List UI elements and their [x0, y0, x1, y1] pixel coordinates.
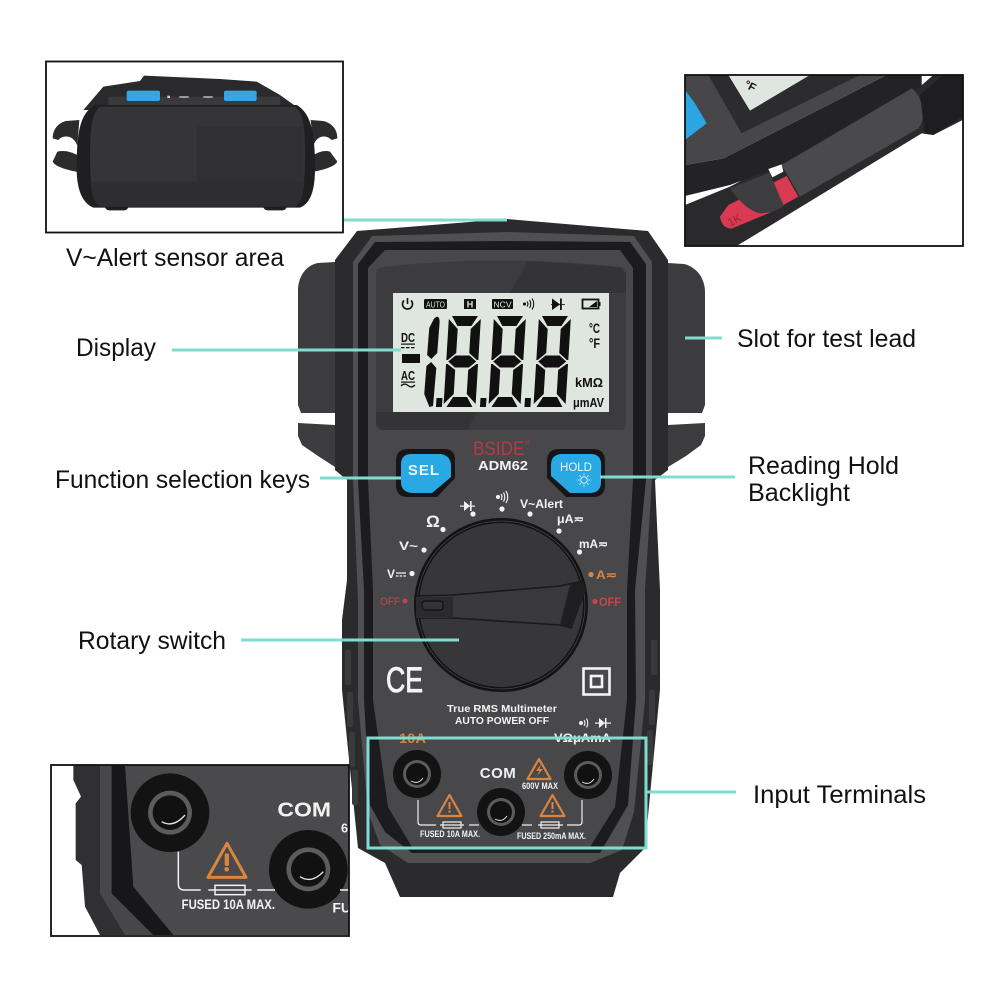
LCD DC AC labels	[401, 330, 420, 387]
LCD digit eight	[533, 316, 571, 407]
meter black band	[685, 75, 922, 196]
LCD DC AC labels: DC	[401, 330, 415, 345]
cropped fuse text: FU	[332, 900, 351, 916]
inset frame 3	[51, 765, 349, 936]
rotary dial scale labels: OFF	[599, 595, 621, 609]
warning: 600V MAX: 600V MAX	[522, 781, 558, 791]
warning triangle: 10A fuse	[438, 795, 462, 816]
fuse ratings: FUSED 250mA MAX.	[517, 831, 586, 841]
display bezel	[708, 75, 860, 133]
COM label: COM	[480, 765, 516, 782]
large jack centre	[269, 830, 348, 909]
fuse ratings	[420, 829, 586, 841]
face plate	[368, 250, 633, 847]
inset frame 2	[685, 75, 963, 246]
brand BSIDE: ®	[525, 439, 531, 447]
grey side band	[100, 765, 153, 935]
blue key	[685, 90, 707, 140]
callout line: V~Alert	[343, 218, 507, 222]
cropped 600V label: 6	[341, 822, 348, 836]
inset frame 1	[46, 62, 343, 232]
product description text: AUTO POWER OFF	[455, 715, 550, 727]
LCD unit labels: μmAV	[573, 395, 604, 410]
label: Display: Display	[76, 334, 156, 362]
SEL key	[396, 449, 455, 497]
terminal symbol labels	[399, 718, 611, 746]
callout line: Slot	[685, 336, 722, 340]
HOLD backlight key: HOLD	[560, 462, 592, 474]
upper clip arm	[782, 88, 923, 197]
rear top of housing	[83, 76, 303, 112]
main rubber body	[77, 105, 315, 208]
meter face	[685, 75, 887, 165]
right test lead clip	[668, 263, 705, 467]
inset: test lead in slot: °F	[742, 79, 758, 95]
rotary dial scale labels	[380, 491, 621, 609]
callout box: input terminals	[368, 738, 646, 848]
LCD screen	[393, 293, 609, 412]
LCD digit one	[423, 317, 447, 407]
inset: top of meter with sensor area	[52, 76, 338, 210]
label: Reading Hold Backlight: Backlight	[748, 479, 850, 507]
LCD status icons	[402, 298, 600, 310]
inset: test lead in slot: 1K	[726, 212, 744, 229]
warning triangle: 250mA fuse	[540, 795, 564, 816]
LCD unit labels: kMΩ	[575, 375, 603, 390]
slot gap	[768, 164, 783, 177]
product description text	[447, 703, 557, 727]
callout line: Hold	[600, 476, 735, 478]
fuse line	[178, 852, 349, 895]
LCD unit labels: °C	[589, 320, 600, 336]
cable cuff	[920, 75, 963, 135]
rotary pointer	[414, 581, 586, 628]
LCD fragment	[728, 75, 810, 111]
SEL key: SEL	[408, 462, 440, 479]
rotary dial scale labels: OFF	[380, 596, 400, 608]
LCD digit eight	[488, 316, 536, 407]
model ADM62: ADM62	[478, 458, 528, 473]
label: Reading Hold Backlight	[748, 452, 899, 507]
clip arms	[53, 120, 337, 172]
double insulation symbol	[584, 668, 610, 694]
LCD status icons: AUTO	[426, 300, 445, 309]
product description text: True RMS Multimeter	[447, 703, 557, 715]
CE mark: CE	[386, 661, 423, 700]
inset: test lead in slot	[685, 75, 963, 246]
rotary dial scale labels: mA≂	[579, 537, 608, 551]
display bezel	[376, 260, 626, 430]
LCD status icons: H	[467, 300, 473, 310]
terminal symbol labels: 10A	[399, 730, 426, 746]
rotary switch	[414, 518, 588, 692]
lower clip arm	[730, 173, 784, 213]
rotary dial scale labels: V	[387, 567, 395, 581]
HOLD backlight key	[547, 449, 605, 497]
callout line: Input terminals	[646, 790, 736, 794]
black test lead	[685, 75, 963, 246]
inset: terminals close-up	[51, 765, 351, 935]
left test lead clip	[298, 262, 335, 467]
feet	[105, 208, 286, 210]
COM label: COM	[277, 800, 331, 822]
rotary dial scale labels: V~Alert	[520, 497, 563, 511]
callout line: Function keys	[320, 476, 401, 480]
rotary dial scale labels: A≂	[596, 568, 617, 582]
fuse text: FUSED 10A MAX.	[182, 896, 275, 912]
label: Slot for test lead: Slot for test lead	[737, 325, 916, 353]
callout line: Display	[172, 348, 401, 352]
callout line: Rotary switch	[241, 638, 459, 642]
LCD DC AC labels: AC	[401, 368, 415, 383]
rubber edge	[73, 765, 173, 935]
LCD digit eight	[443, 316, 492, 407]
warning triangle	[208, 843, 246, 877]
meter rubber housing	[335, 219, 668, 897]
side grip ridges	[345, 640, 657, 805]
rotary dial scale labels: V~	[399, 539, 418, 553]
label: Input Terminals: Input Terminals	[753, 781, 926, 809]
LCD unit labels: °F	[589, 335, 600, 351]
rotary dial scale labels: μA≂	[557, 512, 584, 526]
black groove	[358, 241, 646, 853]
face plate	[125, 765, 349, 935]
fuse ratings: FUSED 10A MAX.	[420, 829, 480, 839]
label: Function selection keys: Function selection keys	[55, 466, 310, 494]
blue keys	[127, 91, 257, 101]
large jack left	[131, 773, 209, 852]
voltage input jack	[564, 751, 612, 799]
brand BSIDE: BSIDE	[473, 439, 530, 460]
label: Reading Hold Backlight: Reading Hold	[748, 452, 899, 480]
COM input jack	[477, 788, 525, 836]
fuse circuit lines	[418, 800, 582, 828]
LCD status icons: NCV	[494, 300, 512, 309]
LCD unit labels	[573, 320, 604, 410]
label: Rotary switch: Rotary switch	[78, 627, 226, 655]
10A input jack	[393, 750, 441, 798]
label: V~Alert sensor area: V~Alert sensor area	[66, 244, 284, 272]
red probe guard	[720, 176, 798, 229]
black groove	[112, 765, 173, 935]
multimeter device	[298, 219, 705, 897]
warning: 600V MAX	[522, 759, 558, 791]
rotary dial scale labels: Ω	[426, 512, 440, 531]
grey inner band	[353, 232, 652, 863]
terminal symbol labels: VΩμAmA	[554, 731, 611, 745]
